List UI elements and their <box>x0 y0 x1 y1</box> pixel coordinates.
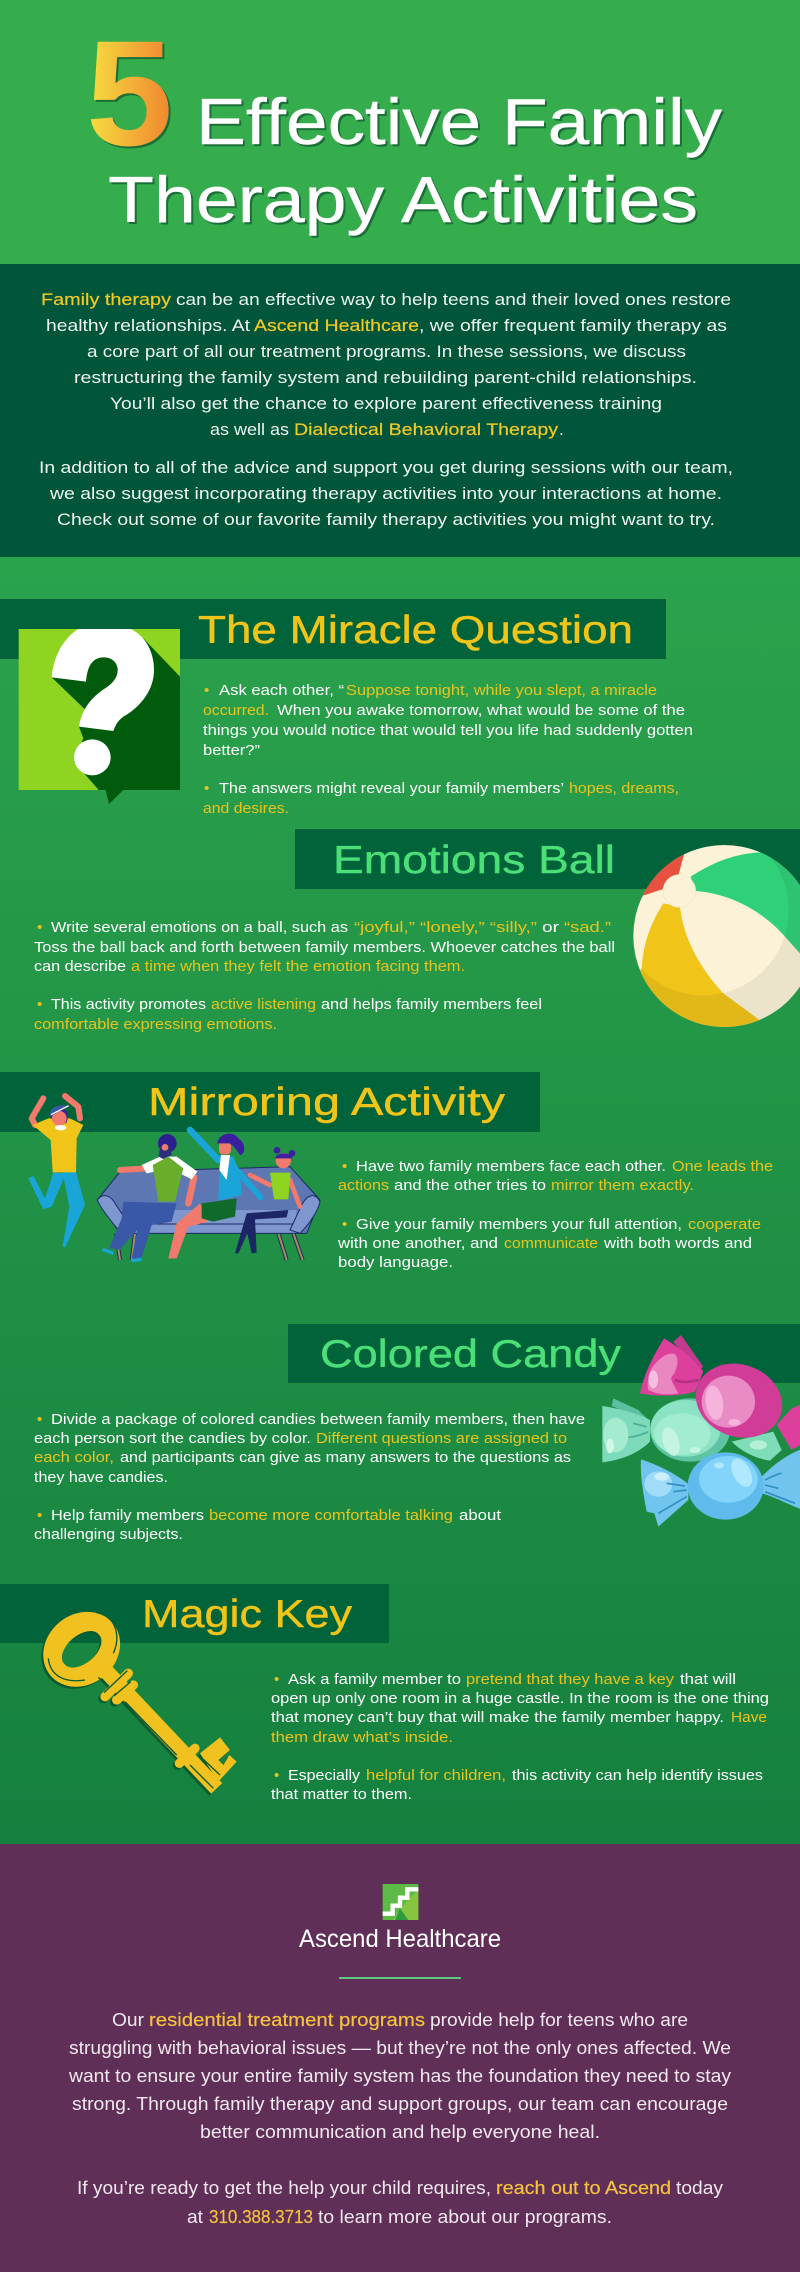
icon: stairs logo mark <box>383 1884 418 1920</box>
logo: Ascend Healthcare: Ascend Healthcare <box>299 1925 501 1953</box>
heading: Colored Candy: Colored Candy <box>320 1333 622 1376</box>
text block: intro paragraph one: Family therapy <box>41 290 172 309</box>
text block: magic key bullets: them draw what’s inside. <box>271 1729 453 1746</box>
text block: intro paragraph two: Check out some of our favorite family therapy activities you might want to try. <box>57 510 715 529</box>
panel: intro <box>0 264 800 557</box>
person: mother <box>168 1130 261 1258</box>
text block: miracle question bullets: better?” <box>203 742 260 759</box>
text block: intro paragraph one: restructuring the family system and rebuilding parent-child relationships. <box>74 368 697 387</box>
text block: mirroring bullets: One leads the <box>672 1158 773 1175</box>
text block: mirroring bullets: • <box>342 1158 347 1175</box>
icon: candies <box>602 1335 800 1527</box>
text block: miracle question bullets: • <box>204 780 209 797</box>
text block: miracle question bullets: hopes, dreams, <box>569 780 679 797</box>
text block: colored candy bullets: become more comfortable talking <box>209 1507 453 1524</box>
text block: colored candy bullets: each color, <box>34 1449 114 1466</box>
panel: activities background <box>0 557 800 1844</box>
text block: colored candy bullets: • <box>37 1507 42 1524</box>
text block: miracle question bullets: The answers might reveal your family members’ <box>219 780 564 797</box>
text block: emotions ball bullets: and helps family members feel <box>321 996 542 1013</box>
text block: mirroring bullets: • <box>342 1216 347 1233</box>
title: Effective Family <box>196 85 723 158</box>
text block: miracle question bullets: Suppose tonight, while you slept, a miracle <box>346 682 657 699</box>
text block: miracle question bullets: occurred. <box>203 702 269 719</box>
text block: magic key bullets: that will <box>680 1671 736 1688</box>
text block: closing paragraph: provide help for teens who are <box>430 2010 688 2030</box>
text block: magic key bullets: that money can’t buy that will make the family member happy. <box>271 1709 724 1726</box>
text block: intro paragraph one: a core part of all our treatment programs. In these sessions, we discuss <box>87 342 686 361</box>
text block: emotions ball bullets: Toss the ball back and forth between family members. Whoever catches the ball <box>34 939 615 956</box>
heading: Magic Key: Magic Key <box>142 1593 353 1636</box>
text block: intro paragraph one: , we offer frequent family therapy as <box>419 316 727 335</box>
text block: emotions ball bullets: can describe <box>34 958 126 975</box>
text block: miracle question bullets: • <box>204 682 209 699</box>
text block: colored candy bullets: and participants can give as many answers to the questions as <box>120 1449 571 1466</box>
text block: intro paragraph one: You’ll also get the chance to explore parent effectiveness training <box>110 394 662 413</box>
teal candy <box>602 1398 782 1462</box>
text block: emotions ball bullets: “sad.” <box>564 919 611 936</box>
text block: intro paragraph one: Ascend Healthcare <box>254 316 419 335</box>
panel: Mirroring Activity <box>0 1072 773 1271</box>
text block: magic key bullets: helpful for children, <box>366 1767 506 1784</box>
text block: closing paragraph: residential treatment programs <box>149 2010 425 2030</box>
text block: miracle question bullets: things you would notice that would tell you life had suddenly gotten <box>203 722 693 739</box>
sofa <box>97 1167 320 1260</box>
text block: call to action: 310.388.3713 <box>209 2207 313 2227</box>
heading: Mirroring Activity <box>0 1072 540 1132</box>
person: father <box>103 1134 197 1261</box>
icon: golden key <box>41 1612 237 1790</box>
text block: colored candy bullets: about <box>459 1507 502 1524</box>
person: child <box>235 1147 300 1253</box>
text block: emotions ball bullets: Write several emotions on a ball, such as <box>51 919 348 936</box>
logo: Ascend Healthcare <box>299 1884 501 1953</box>
text block: magic key bullets: open up only one room in a huge castle. In the room is the one thing <box>271 1690 769 1707</box>
panel: The Miracle Question <box>0 599 693 817</box>
key shadow <box>41 1614 235 1790</box>
heading: The Miracle Question <box>0 599 666 659</box>
text block: call to action: If you’re ready to get the help your child requires, <box>77 2178 491 2198</box>
text block: mirroring bullets: with both words and <box>603 1235 752 1252</box>
text block: magic key bullets: pretend that they have a key <box>466 1671 675 1688</box>
text block: emotions ball bullets: • <box>37 919 42 936</box>
title: 5 <box>86 9 173 177</box>
text block: closing paragraph: Our <box>112 2010 144 2030</box>
text block: intro paragraph one: as well as <box>210 420 289 439</box>
person: dancer <box>28 1096 85 1247</box>
text block: emotions ball bullets: or <box>542 919 559 936</box>
text block: intro paragraph one: healthy relationships. At <box>46 316 250 335</box>
text block: intro paragraph two <box>39 458 733 529</box>
text block: magic key bullets: • <box>274 1767 279 1784</box>
text block: emotions ball bullets: comfortable expressing emotions. <box>34 1016 277 1033</box>
text block: intro paragraph one: . <box>559 420 564 439</box>
heading: Mirroring Activity: Mirroring Activity <box>148 1081 506 1124</box>
text block: intro paragraph one: Dialectical Behavioral Therapy <box>294 420 559 439</box>
icon: beach ball <box>633 845 800 1027</box>
text block: mirroring bullets: Have two family members face each other. <box>356 1158 666 1175</box>
text block: mirroring bullets: with one another, and <box>337 1235 498 1252</box>
text block: emotions ball bullets: • <box>37 996 42 1013</box>
text block: colored candy bullets: Divide a package of colored candies between family members, then have <box>51 1411 585 1428</box>
text block: mirroring bullets: communicate <box>504 1235 598 1252</box>
panel: Magic Key <box>0 1584 769 1803</box>
text block: magic key bullets <box>271 1671 769 1803</box>
text block: closing paragraph: strong. Through family therapy and support groups, our team can encourage <box>72 2094 728 2114</box>
icon: question mark speech bubble <box>19 629 180 804</box>
text block: closing paragraph: want to ensure your entire family system has the foundation they need to stay <box>68 2066 731 2086</box>
heading: Colored Candy <box>288 1324 800 1383</box>
text block: emotions ball bullets: active listening <box>211 996 316 1013</box>
text block: closing paragraph: better communication and help everyone heal. <box>200 2122 600 2142</box>
text block: emotions ball bullets <box>34 919 615 1033</box>
text block: call to action: at <box>187 2207 203 2227</box>
text block: colored candy bullets: challenging subjects. <box>34 1526 183 1543</box>
title <box>86 9 723 236</box>
text block: magic key bullets: Especially <box>288 1767 361 1784</box>
text block: intro paragraph two: we also suggest incorporating therapy activities into your interactions at home. <box>49 484 722 503</box>
text block: magic key bullets: this activity can help identify issues <box>512 1767 763 1784</box>
text block: colored candy bullets: each person sort the candies by color. <box>34 1430 311 1447</box>
blue candy <box>641 1447 800 1527</box>
text block: colored candy bullets: Different questions are assigned to <box>316 1430 567 1447</box>
title: Therapy Activities <box>108 163 698 236</box>
heading: The Miracle Question: The Miracle Question <box>198 609 633 652</box>
panel: header background <box>0 0 800 264</box>
text block: miracle question bullets: When you awake tomorrow, what would be some of the <box>277 702 685 719</box>
text block: magic key bullets: that matter to them. <box>271 1786 412 1803</box>
text block: mirroring bullets: cooperate <box>688 1216 761 1233</box>
text block: mirroring bullets <box>337 1158 773 1271</box>
text block: intro paragraph one: can be an effective way to help teens and their loved ones restore <box>176 290 731 309</box>
text block: emotions ball bullets: “joyful,” “lonely,” “silly,” <box>354 919 537 936</box>
text block: intro paragraph two: In addition to all of the advice and support you get during sessions with our team, <box>39 458 733 477</box>
panel: footer <box>0 1844 800 2272</box>
text block: miracle question bullets: and desires. <box>203 800 289 817</box>
text block: magic key bullets: Ask a family member to <box>288 1671 461 1688</box>
panel: Colored Candy <box>34 1324 800 1543</box>
text block: mirroring bullets: actions <box>338 1177 389 1194</box>
text block: emotions ball bullets: a time when they felt the emotion facing them. <box>131 958 465 975</box>
text block: call to action <box>77 2178 723 2227</box>
text block: closing paragraph <box>68 2010 731 2142</box>
text block: closing paragraph: struggling with behavioral issues — but they’re not the only ones affected. We <box>69 2038 731 2058</box>
text block: colored candy bullets: • <box>37 1411 42 1428</box>
text block: colored candy bullets: Help family members <box>51 1507 204 1524</box>
text block: miracle question bullets: Ask each other, “ <box>219 682 344 699</box>
text block: mirroring bullets: and the other tries to <box>394 1177 546 1194</box>
text block: emotions ball bullets: This activity promotes <box>51 996 206 1013</box>
heading: Emotions Ball: Emotions Ball <box>333 839 615 882</box>
panel: Emotions Ball <box>34 825 800 1042</box>
text block: colored candy bullets <box>34 1411 585 1543</box>
text block: call to action: today <box>676 2178 723 2198</box>
text block: mirroring bullets: Give your family members your full attention, <box>356 1216 682 1233</box>
text block: call to action: reach out to Ascend <box>496 2178 671 2198</box>
text block: miracle question bullets <box>203 682 693 817</box>
heading: Magic Key <box>0 1584 389 1643</box>
illustration: family on sofa with dancer <box>28 1096 320 1261</box>
key body <box>43 1612 237 1788</box>
text block: mirroring bullets: mirror them exactly. <box>551 1177 694 1194</box>
text block: call to action: to learn more about our programs. <box>318 2207 612 2227</box>
heading: Emotions Ball <box>295 829 800 889</box>
text block: colored candy bullets: they have candies. <box>34 1469 168 1486</box>
text block: magic key bullets: • <box>274 1671 279 1688</box>
text block: intro paragraph one <box>41 290 731 439</box>
text block: magic key bullets: Have <box>731 1709 767 1726</box>
pink candy <box>640 1335 800 1450</box>
text block: mirroring bullets: body language. <box>338 1254 453 1271</box>
